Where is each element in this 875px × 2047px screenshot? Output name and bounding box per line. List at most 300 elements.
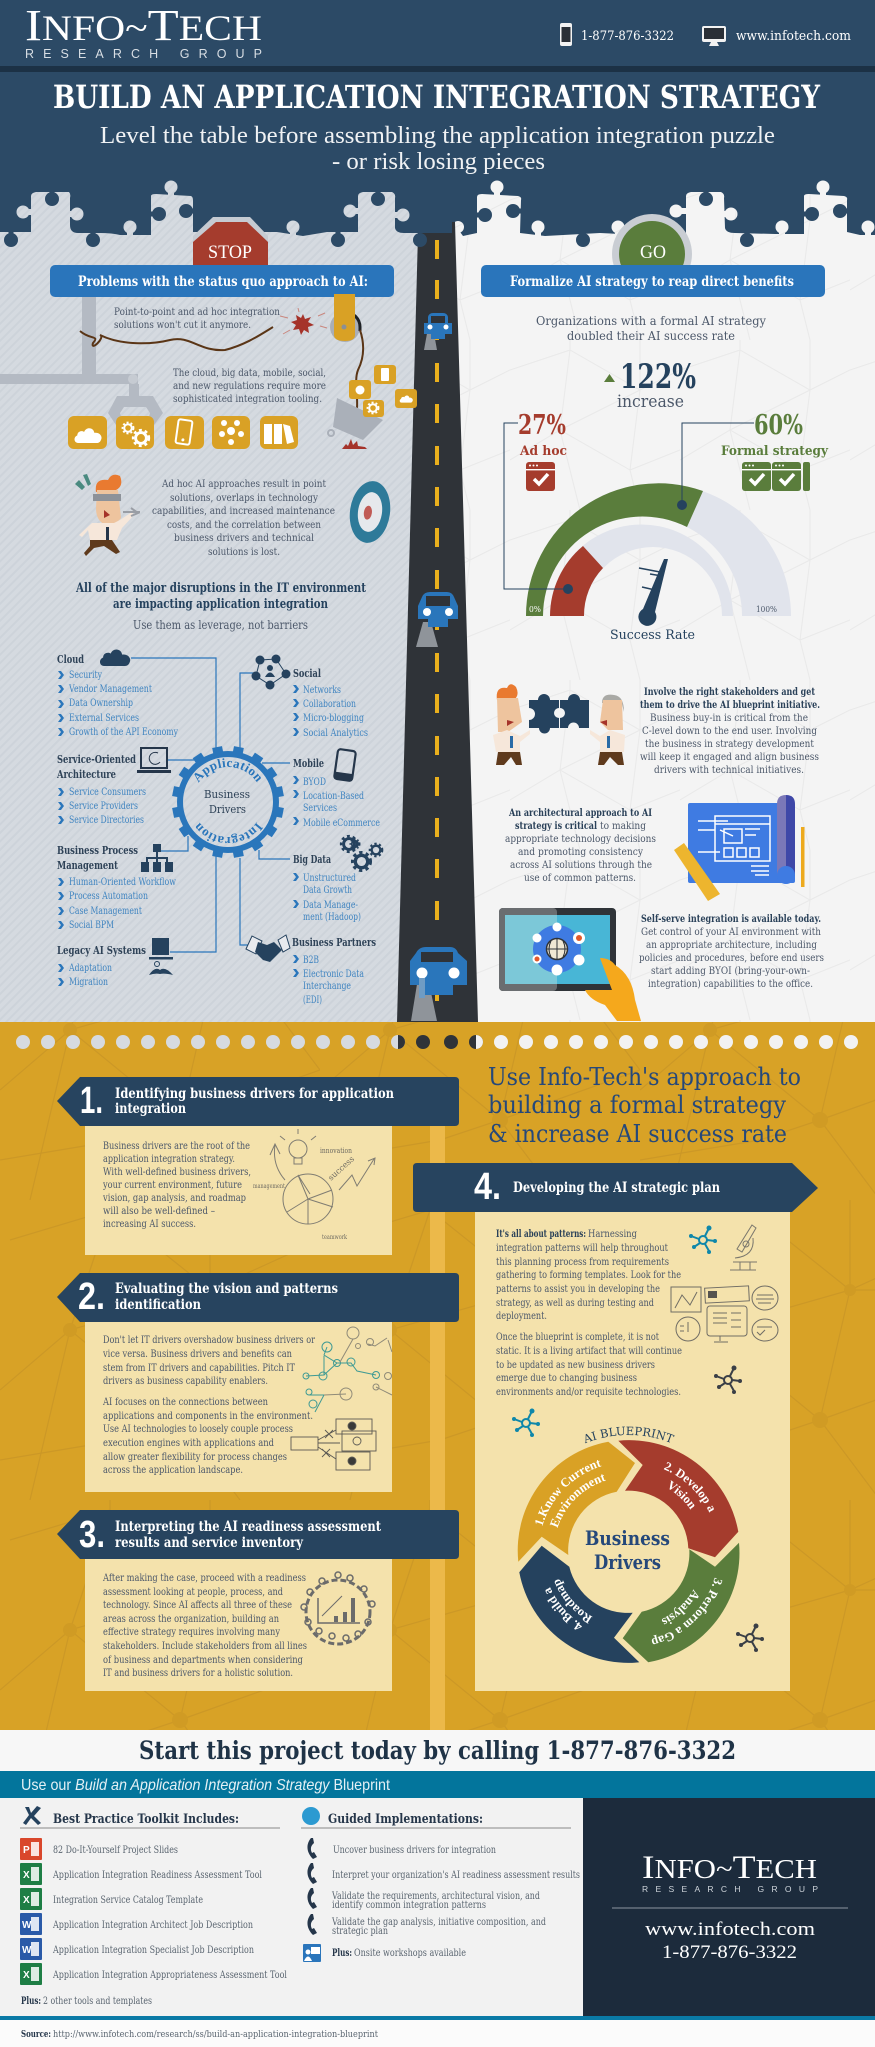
text: architectural approach: across AI solutions through the bbox=[510, 859, 652, 871]
heading banner: formalize bbox=[481, 265, 825, 297]
step 2 text: execution engines with applications and bbox=[103, 1437, 274, 1449]
step 4 text: deployment. bbox=[496, 1310, 547, 1322]
sketch: pie chart and lightbulb: innovation bbox=[320, 1147, 352, 1155]
footer: http://www.infotech.com/research/ss/build-an-application-integration-blueprint bbox=[53, 2029, 378, 2040]
step 2 bbox=[57, 1273, 459, 1492]
toolkit column: Application Integration Specialist Job Description bbox=[52, 1945, 254, 1956]
diagram: AI blueprint cycle: Analysis bbox=[662, 1589, 699, 1624]
ad hoc arc bbox=[550, 546, 603, 616]
logo: INFO~ TECH bbox=[25, 1, 262, 50]
text: self-serve integration: Self-serve integration is available today. bbox=[641, 913, 821, 925]
step 3: results and service inventory bbox=[115, 1535, 304, 1551]
step 2 text: vice versa. Business drivers and benefits can bbox=[102, 1348, 292, 1360]
list: big data: Unstructured bbox=[303, 873, 356, 884]
text: involve stakeholders bbox=[640, 686, 820, 776]
toolkit column: Best Practice Toolkit Includes: bbox=[53, 1812, 239, 1827]
heading: use info-tech's approach: Use Info-Tech's approach to bbox=[488, 1063, 801, 1091]
list: social bbox=[252, 654, 368, 739]
text: ad hoc: business drivers and technical bbox=[174, 532, 315, 544]
icon: gears bbox=[341, 836, 382, 871]
list: business process management bbox=[57, 843, 176, 931]
step 2: 2. bbox=[78, 1276, 105, 1318]
step 2 text: Use AI technologies to loosely couple process bbox=[103, 1423, 293, 1435]
subheading: leverage: Use them as leverage, not barriers bbox=[133, 618, 308, 632]
logo: RESEARCH GROUP bbox=[642, 1884, 818, 1894]
heading: use info-tech's approach bbox=[488, 1063, 801, 1148]
step 3: Interpreting the AI readiness assessment bbox=[115, 1519, 381, 1535]
step 2 text: drivers as business capability enablers. bbox=[103, 1375, 268, 1387]
step 2 text: applications and components in the environment. bbox=[103, 1410, 313, 1422]
formal strategy arc bbox=[526, 483, 703, 616]
list: mobile: Services bbox=[303, 803, 337, 814]
heading banner: formalize: Formalize AI strategy to reap direct benefits bbox=[510, 274, 794, 290]
list: mobile: Mobile bbox=[293, 756, 324, 770]
navy puzzle bbox=[529, 694, 589, 734]
icon: top hat and moustache bbox=[149, 938, 173, 975]
list: cloud: Vendor Management bbox=[68, 684, 152, 695]
icon: powerpoint: P bbox=[23, 1845, 30, 1856]
icon: go sign bbox=[612, 214, 692, 294]
segment 3 perform a gap analysis bbox=[623, 1543, 739, 1662]
list: service-oriented architecture bbox=[56, 748, 171, 826]
guided implementations column: Interpret your organization's AI readiness assessment results bbox=[332, 1870, 580, 1881]
step 4 text: this planning process from requirements bbox=[496, 1256, 669, 1268]
step 4 text: integration patterns will help throughout bbox=[496, 1242, 669, 1254]
icon: monitor bbox=[702, 26, 726, 46]
step 2: Evaluating the vision and patterns bbox=[115, 1281, 338, 1297]
left person bbox=[493, 684, 530, 765]
text: self-serve integration: integration) capabilities to the office. bbox=[648, 978, 813, 990]
list: business process management: Social BPM bbox=[69, 920, 114, 931]
guided implementations column: Uncover business drivers for integration bbox=[333, 1845, 496, 1856]
toolkit column: 82 Do-It-Yourself Project Slides bbox=[53, 1845, 178, 1856]
list: cloud bbox=[57, 649, 178, 738]
call to action band bbox=[0, 1730, 875, 1771]
step 1 text: With well-defined business drivers, bbox=[103, 1166, 251, 1178]
validate requirements: Validate the requirements, architectural vision, and bbox=[331, 1891, 540, 1902]
text: cloud and big data bbox=[173, 367, 326, 405]
step 2 text: Don't let IT drivers overshadow business drivers or bbox=[103, 1334, 316, 1346]
list: cloud: Data Ownership bbox=[69, 698, 133, 709]
step 4 text: Once the blueprint is complete, it is not bbox=[496, 1331, 660, 1343]
text: ad hoc: Ad hoc AI approaches result in point bbox=[161, 478, 327, 490]
icon: excel: X bbox=[23, 1870, 30, 1881]
step 3 text: areas across the organization, building an bbox=[103, 1613, 279, 1625]
teal blueprint band: Use our Build an Application Integration Strategy Blueprint bbox=[21, 1777, 390, 1794]
step 2 text: allow greater flexibility for process changes bbox=[103, 1451, 287, 1463]
icon: org chart bbox=[141, 844, 173, 872]
validate gap analysis: Validate the gap analysis, initiative composition, and bbox=[331, 1917, 546, 1928]
icon: stop sign: STOP bbox=[208, 242, 252, 263]
list: business process management: Human-Oriented Workflow bbox=[69, 877, 176, 888]
step 3 text: After making the case, proceed with a readiness bbox=[102, 1572, 306, 1584]
icon: globe bbox=[302, 1807, 320, 1825]
stat: 122% increase: increase bbox=[617, 392, 684, 412]
sketch: pie chart and lightbulb: teamwork bbox=[322, 1234, 347, 1241]
segment 2 develop a vision bbox=[618, 1440, 738, 1557]
step 1 text: your current environment, future bbox=[102, 1179, 242, 1191]
diagram: AI blueprint cycle: Environment bbox=[550, 1474, 606, 1528]
text: organizations doubled success: Organizations with a formal AI strategy bbox=[536, 313, 767, 328]
list: business process management: Management bbox=[57, 858, 118, 872]
guided implementations column: Guided Implementations: bbox=[328, 1812, 483, 1827]
validate requirements bbox=[331, 1891, 540, 1911]
toolkit column: Application Integration Architect Job Description bbox=[52, 1920, 253, 1931]
diagram: AI blueprint cycle: AI BLUEPRINT bbox=[584, 1426, 674, 1444]
panel: contact bbox=[583, 1798, 875, 2016]
sketch: people circle strategy bbox=[301, 1572, 375, 1644]
illustration: tablet with hand bbox=[499, 908, 641, 1021]
center label business drivers bbox=[585, 1526, 670, 1574]
text: architectural approach bbox=[505, 807, 656, 884]
icon: laptop bbox=[137, 748, 171, 773]
connector lines bbox=[131, 658, 290, 952]
list: cloud: Growth of the API Economy bbox=[69, 727, 178, 738]
illustration: blueprint with ruler and pencil bbox=[674, 795, 804, 901]
step 2 text: AI focuses on the connections between bbox=[102, 1396, 268, 1408]
chart: success rate gauge: 0% bbox=[529, 605, 541, 614]
icon: social network bbox=[252, 654, 290, 690]
text: self-serve integration: an appropriate architecture, including bbox=[646, 939, 817, 951]
sketch: microscope bbox=[730, 1225, 757, 1270]
list: social: Networks bbox=[303, 685, 341, 696]
text: involve stakeholders: the business in strategy development bbox=[645, 738, 815, 750]
icon: word: W bbox=[22, 1920, 32, 1931]
text: architectural approach: to making bbox=[600, 820, 646, 832]
icon row: disruption tiles bbox=[68, 416, 298, 449]
diagram: AI blueprint cycle: 3. Perform a Gap bbox=[652, 1578, 722, 1644]
website: www.infotech.com bbox=[736, 29, 851, 44]
list: business partners: B2B bbox=[303, 955, 319, 966]
center label business drivers: Business bbox=[585, 1526, 670, 1550]
text: ad hoc bbox=[152, 478, 335, 558]
chart: success rate gauge: 100% bbox=[756, 605, 777, 614]
step 1 bbox=[57, 1077, 459, 1255]
diagram: AI blueprint cycle: 1.Know Current bbox=[535, 1460, 602, 1526]
icon: excel bbox=[20, 1888, 42, 1910]
sketch: pie chart and lightbulb: management bbox=[253, 1183, 285, 1190]
step 1 text: increasing AI success. bbox=[103, 1218, 196, 1230]
icon: medium car bbox=[416, 592, 458, 647]
text: self-serve integration: start adding BYOI (bring-your-own- bbox=[651, 965, 810, 977]
step 2 text: stem from IT drivers and capabilities. Pitch IT bbox=[103, 1362, 295, 1374]
step 4 text: strategy, as well as during testing and bbox=[496, 1297, 654, 1309]
step 4 text: environments and/or requisite technologies. bbox=[496, 1386, 681, 1398]
illustration: two people assembling puzzle bbox=[493, 684, 625, 765]
icon: handshake bbox=[246, 935, 290, 962]
step 4: 4. bbox=[474, 1166, 501, 1208]
stat: 27% ad hoc: 27% bbox=[518, 410, 566, 441]
list: big data: ment (Hadoop) bbox=[303, 912, 361, 923]
step 4: Developing the AI strategic plan bbox=[513, 1180, 720, 1196]
list: big data: Data Manage- bbox=[303, 900, 358, 911]
subtitle: - or risk losing pieces bbox=[332, 149, 545, 175]
sketch: monitor and notes bbox=[671, 1286, 778, 1342]
step 4 text: static. It is a living artifact that will continue bbox=[496, 1345, 682, 1357]
list: cloud: Security bbox=[69, 670, 102, 681]
panel: formalize (right, puzzle edge) bbox=[440, 180, 875, 1022]
step 4 text: to be updated as new business drivers bbox=[496, 1359, 655, 1371]
subtitle bbox=[100, 123, 775, 175]
heading: major disruptions: All of the major disruptions in the IT environment bbox=[75, 581, 366, 596]
icon: go sign: GO bbox=[640, 242, 666, 263]
plus onsite workshops bbox=[332, 1948, 466, 1959]
text: architectural approach: An architectural approach to AI bbox=[508, 807, 652, 819]
list: mobile bbox=[293, 749, 380, 829]
text: involve stakeholders: Involve the right stakeholders and get bbox=[644, 686, 815, 698]
diagram: AI blueprint cycle: Vision bbox=[670, 1480, 694, 1510]
text: involve stakeholders: them to drive the AI blueprint initiative. bbox=[640, 699, 820, 711]
stat: 122% increase bbox=[604, 357, 696, 412]
icon: stop sign bbox=[193, 217, 268, 265]
list: business partners: (EDI) bbox=[303, 995, 322, 1006]
dotted road divider bbox=[16, 1035, 858, 1049]
panel: resources bbox=[0, 1798, 583, 2016]
text: involve stakeholders: Business buy-in is critical from the bbox=[650, 712, 808, 724]
gear: application integration business drivers: Business bbox=[204, 787, 250, 801]
step 2 text: across the application landscape. bbox=[103, 1464, 243, 1476]
step 1: integration bbox=[115, 1101, 186, 1117]
step 2: identification bbox=[115, 1297, 201, 1313]
text: architectural approach: and promoting consistency bbox=[518, 846, 643, 858]
step 3 text: assessment looking at people, process, and bbox=[103, 1586, 283, 1598]
illustration: claw machine arm bbox=[0, 297, 163, 425]
text: self-serve integration: Get control of your AI environment with bbox=[641, 926, 821, 938]
diagram: AI blueprint cycle: 4. Build a bbox=[546, 1587, 582, 1630]
list: cloud: External Services bbox=[69, 713, 139, 724]
heading: use info-tech's approach: building a formal strategy bbox=[488, 1091, 786, 1119]
list: business partners: Business Partners bbox=[292, 935, 376, 949]
list: business partners bbox=[246, 935, 376, 1006]
sketch: pie chart and lightbulb: success bbox=[326, 1154, 356, 1182]
stat: 60% formal strategy: 60% bbox=[754, 410, 803, 441]
illustration: frayed rope and pulley bbox=[80, 294, 363, 408]
step 3 text: IT and business drivers for a holistic solution. bbox=[103, 1667, 293, 1679]
text: self-serve integration bbox=[639, 913, 824, 990]
step 1 text: Business drivers are the root of the bbox=[103, 1140, 250, 1152]
heading: use info-tech's approach: & increase AI success rate bbox=[488, 1120, 787, 1148]
header band bbox=[0, 0, 875, 240]
text: involve stakeholders: drivers with technical initiatives. bbox=[654, 764, 804, 776]
panel: approach (gold section) bbox=[0, 1022, 875, 1730]
logo: RESEARCH GROUP bbox=[25, 47, 262, 61]
icon: large car bbox=[410, 947, 467, 1021]
toolkit column bbox=[20, 1806, 287, 2007]
text: point-to-point bbox=[114, 306, 280, 331]
list: legacy AI systems bbox=[57, 938, 173, 988]
diagram: AI blueprint cycle: 2. Develop a bbox=[664, 1462, 714, 1513]
text: architectural approach: strategy is critical bbox=[515, 820, 597, 832]
logo: INFO~ TECH bbox=[642, 1850, 817, 1886]
step 3 text: technology. Since AI affects all three of these bbox=[103, 1599, 292, 1611]
segment 4 build a roadmap bbox=[519, 1546, 639, 1663]
sketch: pie chart and lightbulb bbox=[253, 1129, 375, 1241]
list: service-oriented architecture: Service-Oriented bbox=[57, 752, 136, 766]
step 3 text: of business and departments when considering bbox=[103, 1654, 303, 1666]
gear: application integration business drivers: Drivers bbox=[209, 802, 246, 816]
list: mobile: BYOD bbox=[303, 777, 326, 788]
step 4 text bbox=[496, 1228, 682, 1398]
icon: excel: X bbox=[23, 1970, 30, 1981]
step 4 text: It's all about patterns: bbox=[496, 1228, 586, 1240]
stat: 122% increase: 122% bbox=[620, 357, 696, 397]
step 1 text: will also be well-defined – bbox=[103, 1205, 215, 1217]
validate requirements: identify common integration patterns bbox=[332, 1900, 486, 1911]
validate gap analysis bbox=[331, 1917, 546, 1937]
list: mobile: Location-Based bbox=[303, 791, 364, 802]
step 1 text: vision, gap analysis, and roadmap bbox=[102, 1192, 246, 1204]
gear: application integration business drivers: Application bbox=[194, 758, 261, 783]
stat: 27% ad hoc: Ad hoc bbox=[519, 444, 567, 459]
heading: major disruptions: are impacting application integration bbox=[113, 597, 328, 612]
icon: smartphone bbox=[334, 749, 356, 781]
list: service-oriented architecture: Service Consumers bbox=[69, 787, 146, 798]
stat: 27% ad hoc bbox=[518, 410, 567, 491]
footer: Source: bbox=[21, 2029, 51, 2040]
icon: teal molecule bbox=[689, 1226, 717, 1254]
contact website: www.infotech.com bbox=[645, 1919, 815, 1940]
text: ad hoc: costs, and the correlation between bbox=[167, 519, 321, 531]
center label business drivers: Drivers bbox=[594, 1550, 661, 1574]
step 1 text bbox=[102, 1140, 251, 1230]
guided implementations column bbox=[301, 1807, 580, 1962]
text: architectural approach: appropriate technology decisions bbox=[505, 833, 656, 845]
segment 1 know current environment bbox=[518, 1442, 635, 1562]
icon: excel bbox=[20, 1863, 42, 1885]
panel: status quo (left, puzzle edge) bbox=[0, 180, 440, 1022]
list: business process management: Business Process bbox=[57, 843, 138, 857]
list: service-oriented architecture: Service Providers bbox=[69, 801, 138, 812]
text: ad hoc: capabilities, and increased maintenance bbox=[152, 505, 335, 517]
list: legacy AI systems: Migration bbox=[69, 977, 108, 988]
list: big data: Big Data bbox=[293, 852, 331, 866]
list: service-oriented architecture: Service Directories bbox=[69, 815, 144, 826]
list: business partners: Interchange bbox=[303, 981, 351, 992]
icon: word bbox=[20, 1913, 42, 1935]
sketch: network of nodes bbox=[303, 1327, 392, 1412]
list: service-oriented architecture: Architecture bbox=[56, 767, 116, 781]
toolkit column: Integration Service Catalog Template bbox=[53, 1895, 203, 1906]
icon: phone bbox=[560, 23, 572, 46]
icon: dark molecule lower bbox=[736, 1624, 764, 1652]
step 1: 1. bbox=[80, 1080, 103, 1122]
step 4 text: Harnessing bbox=[588, 1228, 637, 1240]
step 3 text: effective strategy requires involving many bbox=[103, 1626, 280, 1638]
list: legacy AI systems: Adaptation bbox=[68, 963, 112, 974]
list: business process management: Process Automation bbox=[69, 891, 148, 902]
list: mobile: Mobile eCommerce bbox=[303, 818, 380, 829]
plus other tools: 2 other tools and templates bbox=[43, 1996, 152, 2007]
step 3: 3. bbox=[79, 1514, 105, 1556]
list: big data: Data Growth bbox=[303, 885, 352, 896]
chart: success rate gauge bbox=[504, 423, 791, 643]
heading: major disruptions bbox=[75, 581, 366, 612]
diagram: AI blueprint cycle: Roadmap bbox=[554, 1580, 592, 1624]
gear: application integration business drivers bbox=[172, 746, 284, 858]
list: business partners: Electronic Data bbox=[303, 969, 364, 980]
stat: 60% formal strategy: Formal strategy bbox=[721, 444, 828, 459]
road bbox=[397, 222, 478, 1022]
text: point-to-point: solutions won't cut it anymore. bbox=[114, 319, 251, 331]
text: self-serve integration: policies and procedures, before end users bbox=[639, 952, 824, 964]
icon: teal molecule lower bbox=[512, 1408, 540, 1437]
right person bbox=[590, 695, 625, 765]
phone number: 1-877-876-3322 bbox=[581, 29, 674, 44]
footer bbox=[0, 2016, 875, 2047]
gear: application integration business drivers: Integration bbox=[196, 822, 264, 844]
icon: target bbox=[346, 479, 394, 545]
text: organizations doubled success bbox=[536, 313, 767, 343]
toolkit column: Application Integration Appropriateness Assessment Tool bbox=[52, 1970, 287, 1981]
validate gap analysis: strategic plan bbox=[332, 1926, 388, 1937]
step 4 text: gathering to forming templates. Look for the bbox=[496, 1269, 681, 1281]
text: cloud and big data: The cloud, big data, mobile, social, bbox=[173, 367, 326, 379]
text: involve stakeholders: will keep it engaged and align business bbox=[640, 751, 819, 763]
icon: word: W bbox=[22, 1945, 32, 1956]
step 4 text: patterns to assist you in developing the bbox=[496, 1283, 660, 1295]
icon: excel: X bbox=[23, 1895, 30, 1906]
plus onsite workshops: Plus: bbox=[332, 1948, 352, 1959]
step 1: Identifying business drivers for application bbox=[115, 1086, 394, 1102]
text: ad hoc: solutions is lost. bbox=[208, 546, 280, 558]
list: social: Social bbox=[293, 666, 321, 680]
chart: success rate gauge: Success Rate bbox=[610, 628, 695, 643]
text: architectural approach: use of common patterns. bbox=[524, 872, 636, 884]
step 3 text bbox=[102, 1572, 307, 1679]
needle bbox=[638, 559, 668, 626]
text: cloud and big data: sophisticated integration tooling. bbox=[173, 393, 322, 405]
sketch: decision documents bbox=[291, 1419, 376, 1470]
illustration: cart with falling tiles bbox=[328, 365, 417, 449]
heading banner: problems: Problems with the status quo approach to AI: bbox=[78, 274, 368, 290]
icon: powerpoint bbox=[20, 1838, 42, 1860]
text: point-to-point: Point-to-point and ad hoc integration bbox=[114, 306, 280, 318]
teal blueprint band bbox=[0, 1771, 875, 1798]
step 3 text: stakeholders. Include stakeholders from all lines bbox=[103, 1640, 307, 1652]
text: involve stakeholders: C-level down to the end user. Involving bbox=[642, 725, 817, 737]
diagram: AI blueprint cycle bbox=[518, 1426, 740, 1663]
text: organizations doubled success: doubled their AI success rate bbox=[567, 328, 735, 343]
text: cloud and big data: and new regulations require more bbox=[173, 380, 326, 392]
step 4 bbox=[413, 1163, 818, 1691]
list: big data bbox=[293, 836, 382, 923]
list: business process management: Case Management bbox=[69, 906, 142, 917]
plus onsite workshops: Onsite workshops available bbox=[354, 1948, 466, 1959]
toolkit column: Application Integration Readiness Assessment Tool bbox=[52, 1870, 262, 1881]
icon: cloud bbox=[100, 649, 130, 666]
plus other tools bbox=[21, 1996, 152, 2007]
icon: workshop bbox=[303, 1944, 321, 1962]
icon: dark molecule bbox=[714, 1366, 742, 1394]
call to action band: Start this project today by calling 1-877-876-3322 bbox=[139, 1736, 736, 1765]
list: cloud: Cloud bbox=[57, 652, 84, 666]
heading banner: problems bbox=[50, 265, 394, 297]
list: social: Collaboration bbox=[303, 699, 356, 710]
stat: 60% formal strategy bbox=[721, 410, 828, 491]
subtitle: Level the table before assembling the application integration puzzle bbox=[100, 123, 775, 149]
step 4 text: emerge due to changing business bbox=[496, 1372, 637, 1384]
plus other tools: Plus: bbox=[21, 1996, 41, 2007]
contact phone: 1-877-876-3322 bbox=[662, 1942, 797, 1963]
list: social: Micro-blogging bbox=[303, 713, 364, 724]
icon: excel bbox=[20, 1963, 42, 1985]
text: ad hoc: solutions, overlaps in technology bbox=[170, 492, 318, 504]
step 2 text bbox=[102, 1334, 316, 1476]
icon: word bbox=[20, 1938, 42, 1960]
step 3 bbox=[57, 1510, 459, 1691]
list: legacy AI systems: Legacy AI Systems bbox=[57, 943, 146, 957]
icon: crossed tools bbox=[23, 1806, 41, 1825]
